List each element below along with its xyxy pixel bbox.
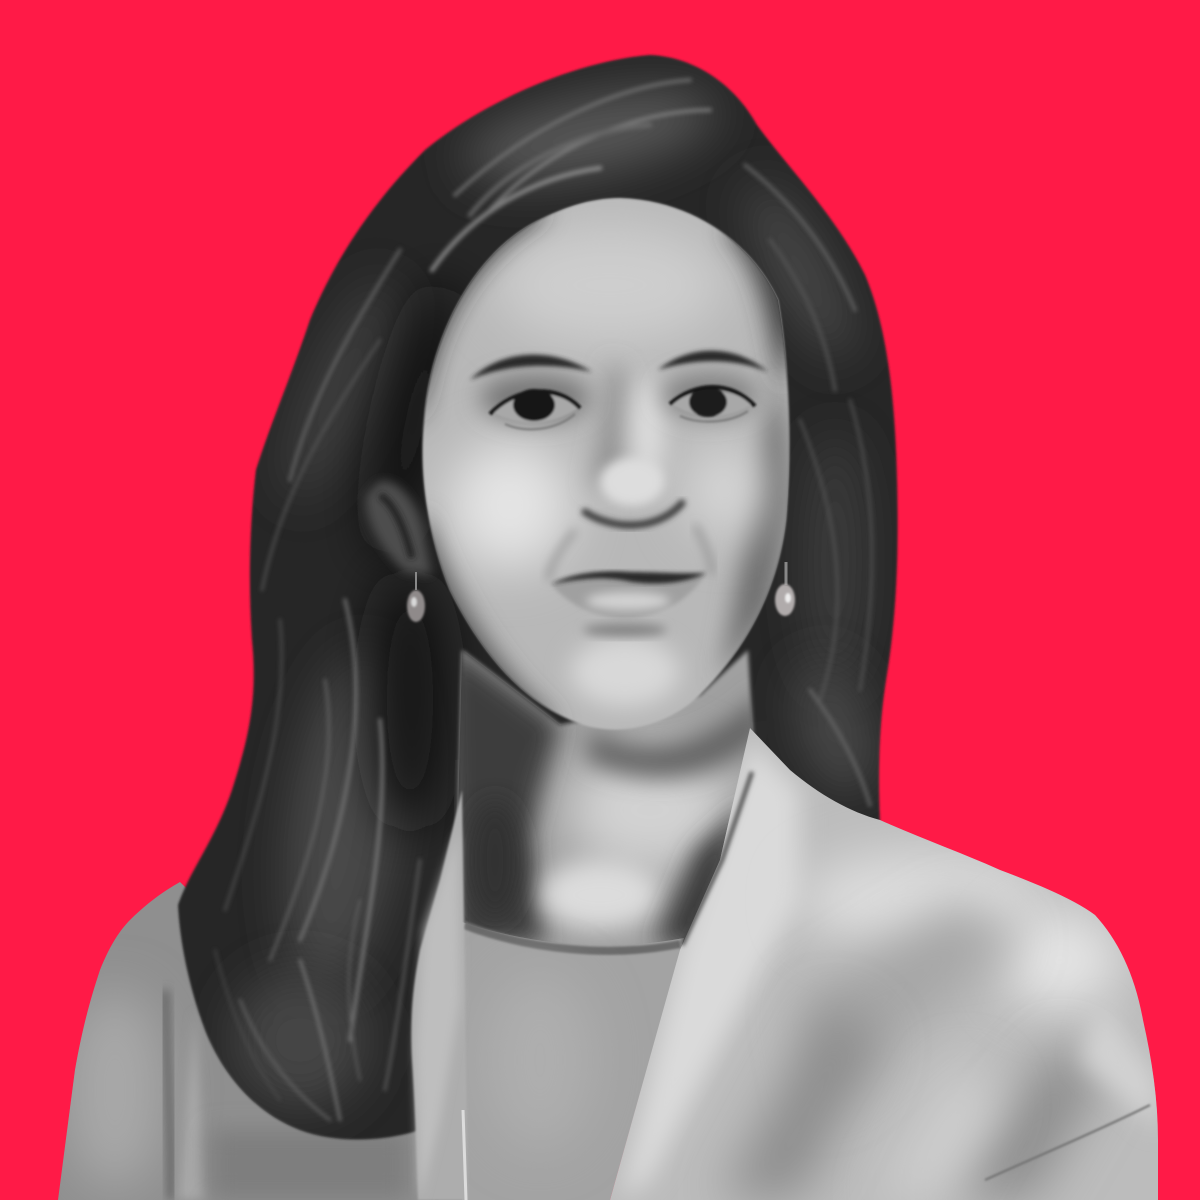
hair strands crown — [290, 80, 855, 480]
hairline shadow — [424, 212, 558, 426]
left jaw shadow — [428, 510, 564, 715]
dark backing under collar — [450, 720, 770, 980]
eyebrows — [470, 351, 768, 380]
soft tonal zones in hair — [455, 71, 725, 199]
left cheek highlight — [448, 440, 572, 570]
left eye — [490, 389, 580, 429]
neck — [455, 648, 756, 946]
hair strands left — [215, 340, 420, 1120]
eye socket shadows — [480, 374, 590, 422]
chin — [570, 637, 680, 707]
face — [405, 195, 805, 729]
right cardigan — [610, 728, 1158, 1200]
left cardigan collar — [411, 790, 468, 1200]
right cheek highlight — [685, 442, 765, 538]
hair mass — [178, 55, 898, 1139]
right eye — [670, 387, 755, 422]
nasolabial fold — [548, 530, 575, 580]
ear and earring left — [366, 481, 432, 622]
forehead light — [495, 225, 725, 345]
mouth — [550, 571, 706, 618]
nose tip — [600, 458, 664, 506]
t-shirt — [462, 922, 684, 1200]
nose bridge shading — [590, 360, 625, 490]
right face shadow — [720, 380, 795, 680]
left shoulder of cardigan — [58, 882, 470, 1200]
earring right — [775, 562, 795, 616]
hair strands right — [800, 400, 872, 805]
